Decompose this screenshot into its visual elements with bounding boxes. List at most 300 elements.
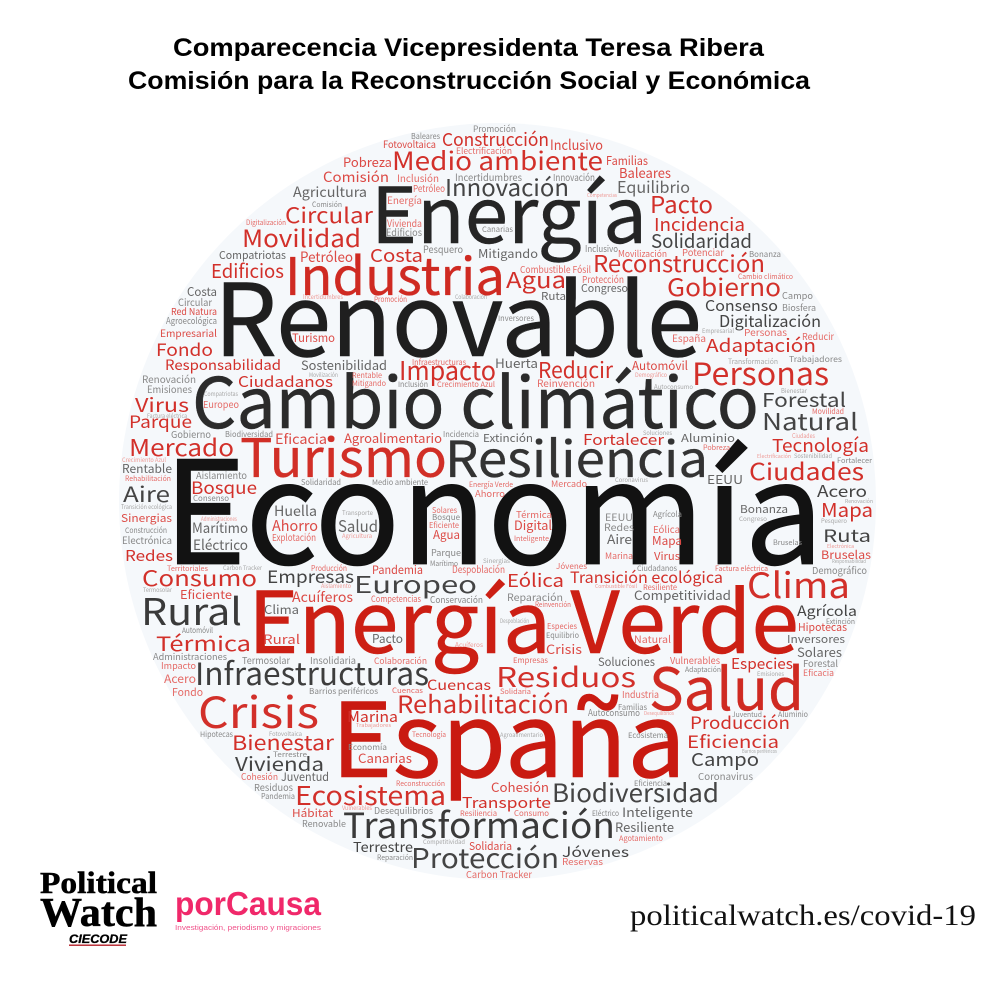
small words: Comisión [323, 167, 389, 187]
small words: Marina [605, 550, 633, 562]
small words: Red Natura [171, 304, 217, 318]
small words: Equilibrio [546, 630, 579, 641]
small words: Resiliencia [460, 808, 497, 819]
medium words: Tecnología [772, 432, 869, 458]
small words: Clima [264, 601, 299, 618]
small words: Bosque [432, 512, 461, 523]
small words: Inclusivo [550, 135, 603, 155]
medium words: Competitividad [634, 585, 731, 604]
small words: Solidaridad [301, 477, 341, 488]
medium words: Virus [135, 391, 189, 418]
small words: Renovable [302, 817, 346, 830]
small words: Competitividad [423, 837, 465, 846]
small words: Digital [514, 515, 552, 534]
small words: Automóvil [632, 357, 688, 374]
small words: Agotamiento [619, 833, 663, 844]
small words: Familias [606, 152, 648, 169]
medium words: Acero [817, 478, 867, 502]
small words: Barrios periféricos [742, 748, 778, 755]
small words: Demográfico [812, 563, 867, 577]
small words: Coronavirus [698, 769, 754, 783]
small words: Factura eléctrica [147, 411, 187, 420]
small words: Solidaria [500, 687, 531, 697]
small words: Reparación [377, 853, 413, 863]
small words: Fondo [172, 685, 203, 700]
small words: Trabajadores [356, 721, 391, 729]
small words: Bonanza [740, 501, 788, 517]
medium words: Forestal [762, 386, 846, 413]
small words: Pobreza [703, 443, 730, 453]
small words: Agrícola [653, 509, 682, 520]
small words: Responsabilidad [832, 558, 866, 565]
small words: Hipotecas [200, 729, 233, 740]
small words: Cohesión [491, 777, 549, 796]
small words: Reconstrucción [396, 779, 445, 789]
medium words: Eólica [507, 567, 564, 593]
medium words: Marina [347, 706, 398, 727]
medium words: Rehabilitación [397, 685, 569, 720]
small words: Especies [547, 621, 577, 632]
logo: CIECODE: CIECODE [69, 932, 128, 946]
small words: Trabajadores [789, 354, 842, 365]
small words: Inclusión [398, 379, 428, 390]
small words: Edificios [386, 224, 422, 239]
small words: Personas [744, 325, 788, 339]
small words: Jóvenes [556, 561, 587, 572]
small words: Fortalecer [837, 456, 872, 466]
title: Comisión para la Reconstrucción Social y Económica [128, 67, 811, 95]
small words: Economía [348, 742, 387, 753]
medium words: Incidencia [654, 211, 745, 237]
small words: Petróleo [413, 181, 445, 195]
small words: Sostenibilidad [301, 355, 387, 374]
small words: Eficiente [180, 586, 232, 603]
small words: Mitigando [352, 378, 386, 389]
small words: Aluminio [681, 430, 735, 446]
small words: Marítimo [192, 518, 248, 538]
small words: Aislamiento [196, 468, 247, 482]
medium words: Bienestar [232, 727, 334, 756]
small words: Pesquero [821, 516, 847, 525]
small words: Circular [178, 294, 212, 309]
small words: Virus [654, 548, 680, 564]
small words: Huella [274, 501, 317, 521]
medium words: Agrícola [797, 601, 857, 621]
small words: Adaptación [685, 665, 721, 675]
small words: Eólica [653, 522, 680, 536]
small words: Despoblación [452, 561, 505, 576]
small words: Extinción [826, 617, 855, 627]
medium words: Costa [370, 242, 423, 268]
word: Cambio climático: Cambio climático [192, 348, 759, 449]
small words: Electrificación [456, 145, 512, 157]
small words: Resiliente [643, 582, 677, 593]
small words: Cambio climático [738, 272, 793, 282]
medium words: Térmica [156, 628, 251, 657]
small words: Salud [338, 513, 378, 537]
small words: Juventud [732, 710, 762, 720]
small words: Desequilibrios [644, 710, 675, 717]
small words: Gobierno [171, 427, 211, 441]
small words: Reinvención [535, 600, 571, 610]
medium words: Solidaridad [651, 227, 752, 254]
word: Clima: Clima [747, 558, 850, 609]
small words: Eléctrico [193, 535, 248, 555]
small words: Promoción [473, 123, 516, 135]
medium words: Biodiversidad [552, 774, 719, 810]
small words: Medio ambiente [372, 477, 428, 488]
small words: EEUU [605, 509, 633, 524]
medium words: Fondo [156, 336, 213, 361]
medium words: Terrestre [353, 836, 413, 856]
small words: Renovación [845, 497, 873, 505]
small words: Terrestre [273, 750, 307, 760]
medium words: Adaptación [706, 332, 816, 358]
small words: EEUU [707, 471, 743, 488]
small words: Construcción [125, 525, 167, 536]
small words: Hábitat [292, 805, 333, 821]
logo: porCausa: porCausa [175, 885, 322, 922]
small words: Emisiones [757, 669, 784, 678]
small words: Competencias [587, 191, 617, 199]
small words: Huerta [495, 353, 538, 372]
medium words: Medio ambiente [392, 142, 603, 178]
small words: Cohesión [241, 770, 278, 783]
small words: Equilibrio [617, 174, 690, 198]
small words: Empresarial [160, 325, 217, 340]
small words: Sinergias [483, 556, 510, 565]
small words: Empresas [513, 655, 548, 666]
small words: Transformación [728, 357, 778, 367]
word: Salud: Salud [649, 643, 804, 727]
small words: Termosolar [242, 653, 290, 667]
medium words: Circular [285, 200, 374, 230]
small words: Compatriotas [204, 389, 238, 398]
small words: Residuos [254, 780, 294, 794]
small words: Ahorro [475, 487, 505, 500]
word: Energía: Energía [371, 155, 647, 266]
small words: Forestal [803, 656, 838, 670]
small words: Electrónica [827, 542, 854, 550]
small words: Mercado [551, 478, 587, 490]
small words: Transición ecológica [121, 501, 172, 511]
word: Energía Verde: Energía Verde [248, 555, 799, 678]
small words: Congreso [581, 281, 628, 296]
medium words: Impacto [399, 351, 496, 388]
small words: Pacto [372, 630, 403, 647]
small words: Promoción [374, 294, 407, 305]
small words: Inteligente [622, 802, 693, 821]
small words: Marítimo [430, 559, 458, 569]
small words: Cuencas [392, 686, 424, 696]
small words: Carbon Tracker [223, 563, 263, 572]
small words: Solidaria [469, 838, 512, 854]
word: Economía: Economía [163, 399, 824, 606]
small words: Redes [604, 519, 634, 534]
word cloud [119, 123, 876, 881]
small words: Aislamiento [321, 581, 351, 590]
word: España: España [331, 658, 686, 807]
medium words: Europeo [354, 566, 477, 600]
medium words: Reducir [538, 353, 613, 385]
small words: Desequilibrios [374, 804, 433, 817]
medium words: Construcción [442, 126, 549, 152]
small words: Acero [164, 671, 196, 687]
medium words: Parque [129, 408, 192, 433]
small words: Impacto [161, 659, 196, 672]
small words: Reparación [507, 589, 563, 604]
small words: Incertidumbres [303, 291, 343, 301]
medium words: Bosque [191, 474, 257, 499]
small words: Fotovoltaica [269, 729, 302, 738]
small words: Rentable [122, 460, 172, 477]
medium words: Innovación [445, 169, 569, 203]
medium words: Cuencas [427, 675, 492, 695]
small words: Automóvil [182, 625, 213, 636]
medium words: Vivienda [235, 750, 324, 777]
word: Protección: Protección [411, 837, 559, 876]
medium words: Residuos [496, 656, 636, 695]
small words: Pobreza [343, 152, 392, 171]
small words: Aire [607, 529, 632, 548]
small words: Eficiente [429, 520, 460, 531]
small words: Renovación [142, 371, 196, 386]
small words: Inversores [787, 631, 845, 647]
small words: Sostenibilidad [794, 451, 832, 460]
small words: Demográfico [635, 370, 667, 379]
small words: Bienestar [781, 385, 807, 395]
small words: Baleares [619, 162, 671, 182]
small words: Comisión [312, 200, 342, 210]
small words: Inclusión [397, 170, 439, 185]
medium words: Mapa [821, 496, 873, 523]
small words: Ciudadanos [637, 563, 677, 574]
medium words: Eficiencia [687, 728, 779, 753]
small words: Empresarial [702, 326, 734, 335]
small words: Inclusivo [585, 242, 618, 255]
small words: Acuíferos [455, 639, 483, 649]
small words: Despoblación [500, 616, 529, 625]
small words: Movilización [309, 370, 338, 379]
medium words: Gobierno [667, 268, 781, 303]
medium words: Ecosistema [295, 776, 446, 813]
small words: Protección [582, 272, 624, 286]
small words: Agroecológica [166, 314, 217, 327]
word: Renovable: Renovable [214, 240, 702, 385]
small words: Rentable [352, 370, 382, 381]
medium words: Transición ecológica [570, 566, 723, 588]
small words: Innovación [553, 170, 595, 184]
small words: Conservación [430, 593, 483, 606]
small words: Eficacia [803, 667, 834, 679]
small words: Colaboración [455, 292, 487, 301]
small words: Inversores [498, 313, 534, 324]
medium words [123, 126, 873, 862]
small words: Familias [618, 702, 647, 713]
small words: Termosolar [143, 585, 173, 594]
medium words: Responsabilidad [165, 355, 281, 375]
small words: Explotación [272, 530, 316, 544]
small words: Canarias [482, 224, 513, 235]
small words: Hipotecas [798, 619, 847, 635]
small words: Insolidaria [310, 653, 356, 667]
small words: Producción [311, 563, 347, 574]
small words: Combustible Fósil [520, 262, 591, 276]
small words: Bruselas [773, 538, 803, 548]
medium words: Ciudades [749, 453, 864, 487]
small words: Potenciar [682, 245, 724, 259]
small words: Incertidumbres [455, 169, 522, 184]
small words: Agricultura [293, 182, 367, 202]
small words: Eficiencia [634, 778, 667, 789]
small words: Crecimiento Azul [122, 455, 166, 464]
small words: Mapa [652, 532, 682, 549]
small words: Incidencia [443, 429, 479, 440]
logo: Political Watch [40, 865, 157, 946]
small words: Eléctrico [592, 808, 619, 819]
small words: Agroalimentario [344, 428, 442, 447]
small words: Rural [263, 629, 300, 648]
small words: Energía [387, 192, 422, 207]
small words: Barrios periféricos [309, 686, 378, 697]
small words: Administraciones [153, 650, 227, 663]
small words: Rehabilitación [125, 474, 171, 484]
small words: Electrónica [122, 532, 172, 547]
small words: Solares [797, 642, 842, 661]
small words: Parque [431, 546, 461, 559]
small words: Petróleo [300, 247, 353, 267]
small words: Agricultura [342, 531, 372, 540]
word cloud background circle [119, 123, 876, 880]
logo: Political Watch: Political [40, 865, 157, 900]
medium words: Natural [762, 403, 858, 437]
small words: Carbon Tracker [466, 867, 532, 881]
medium words: Fortalecer [583, 429, 664, 450]
small words: Aluminio [778, 709, 808, 720]
medium words: Ciudadanos [238, 371, 333, 392]
medium words: Redes [125, 545, 173, 566]
small words: Digitalización [246, 218, 286, 228]
small words: Inteligente [514, 534, 549, 544]
small words: Congreso [739, 514, 767, 523]
small words: Soluciones [643, 428, 672, 437]
small words: Coronavirus [615, 475, 648, 484]
small words: Natural [634, 631, 671, 646]
small words: Europeo [203, 397, 239, 411]
small words: Combustible Fósil [595, 582, 637, 590]
word: Turismo: Turismo [240, 417, 447, 493]
small words: Pandemia [372, 562, 423, 578]
small words: Infraestructuras [412, 357, 466, 368]
small words: Vulnerables [342, 803, 372, 812]
small words: Transporte [342, 507, 373, 517]
small words: Resiliente [615, 817, 674, 836]
small words: Agua [433, 526, 460, 543]
word: Resiliencia: Resiliencia [445, 420, 708, 492]
small words: Campo [782, 289, 813, 302]
small words: Consenso [193, 493, 229, 504]
medium words: Digitalización [719, 308, 821, 332]
small words: Juventud [281, 769, 329, 785]
title [128, 34, 811, 95]
small words: Baleares [411, 131, 440, 142]
small words: Movilización [618, 247, 667, 260]
small words: Competencias [371, 593, 421, 605]
small words: Tecnología [412, 730, 446, 740]
word: Rural: Rural [141, 582, 242, 636]
small words: Administraciones [201, 514, 237, 523]
small words: Sinergias [121, 510, 172, 526]
medium words: Personas [692, 349, 829, 394]
small words: Pesquero [423, 241, 463, 256]
small words: Energía Verde [469, 480, 513, 490]
small words: Ahorro [272, 515, 318, 536]
small words: Vulnerables [670, 653, 721, 667]
medium words: Ruta [823, 522, 871, 547]
small words: Fotovoltaica [383, 136, 436, 151]
medium words: Mercado [129, 429, 234, 463]
small words: Industria [622, 687, 659, 701]
small words: Emisiones [147, 381, 192, 396]
small words: Pandemia [261, 791, 295, 802]
medium words: Edificios [211, 257, 284, 284]
small words: Soluciones [598, 654, 655, 670]
small words: Eficacia [275, 429, 327, 449]
word: Crisis: Crisis [198, 679, 319, 741]
small words: Ruta [541, 288, 566, 304]
medium words: Campo [691, 746, 759, 772]
small words: Autoconsumo [654, 381, 693, 391]
small words: Colaboración [374, 655, 427, 667]
small words: Crisis [546, 639, 582, 658]
small words: Bonanza [749, 249, 781, 260]
small words: España [672, 330, 706, 345]
medium words: Transporte [462, 792, 551, 813]
small words: Biosfera [782, 301, 816, 314]
medium words: Jóvenes [562, 842, 630, 862]
word: Infraestructuras: Infraestructuras [195, 649, 429, 694]
medium words: Movilidad [242, 219, 361, 254]
small words: Consumo [514, 808, 549, 819]
logo: Political Watch: Watch [40, 889, 157, 935]
medium words: Reconstrucción [593, 245, 765, 279]
small words: Crecimiento Azul [437, 379, 495, 390]
medium words: Pacto [650, 186, 713, 220]
word: Industria: Industria [285, 235, 505, 310]
logo: porCausa: Investigación, periodismo y migraciones [175, 923, 321, 932]
small words: Biodiversidad [225, 429, 273, 440]
small words: Acuíferos [292, 587, 353, 607]
website url: politicalwatch.es/covid-19 [630, 899, 976, 932]
medium words: Agua [506, 263, 566, 295]
small words: Reducir [802, 329, 834, 343]
small words: Compatriotas [219, 247, 286, 263]
small words: Extinción [483, 430, 533, 446]
small words: Autoconsumo [588, 706, 640, 719]
medium words: Aire [123, 479, 170, 509]
small words: Térmica [516, 508, 552, 521]
medium words: Consumo [142, 563, 257, 593]
small words: Movilidad [812, 406, 844, 417]
word: Transformación: Transformación [343, 798, 615, 849]
medium words: Producción [690, 709, 790, 734]
small words: Reservas [562, 855, 603, 868]
small words: Solares [432, 505, 457, 516]
medium words: Especies [731, 653, 793, 674]
title: Comparecencia Vicepresidenta Teresa Ribera [173, 34, 765, 62]
small words: Reinvención [537, 375, 595, 390]
small words: Territoriales [167, 564, 209, 574]
